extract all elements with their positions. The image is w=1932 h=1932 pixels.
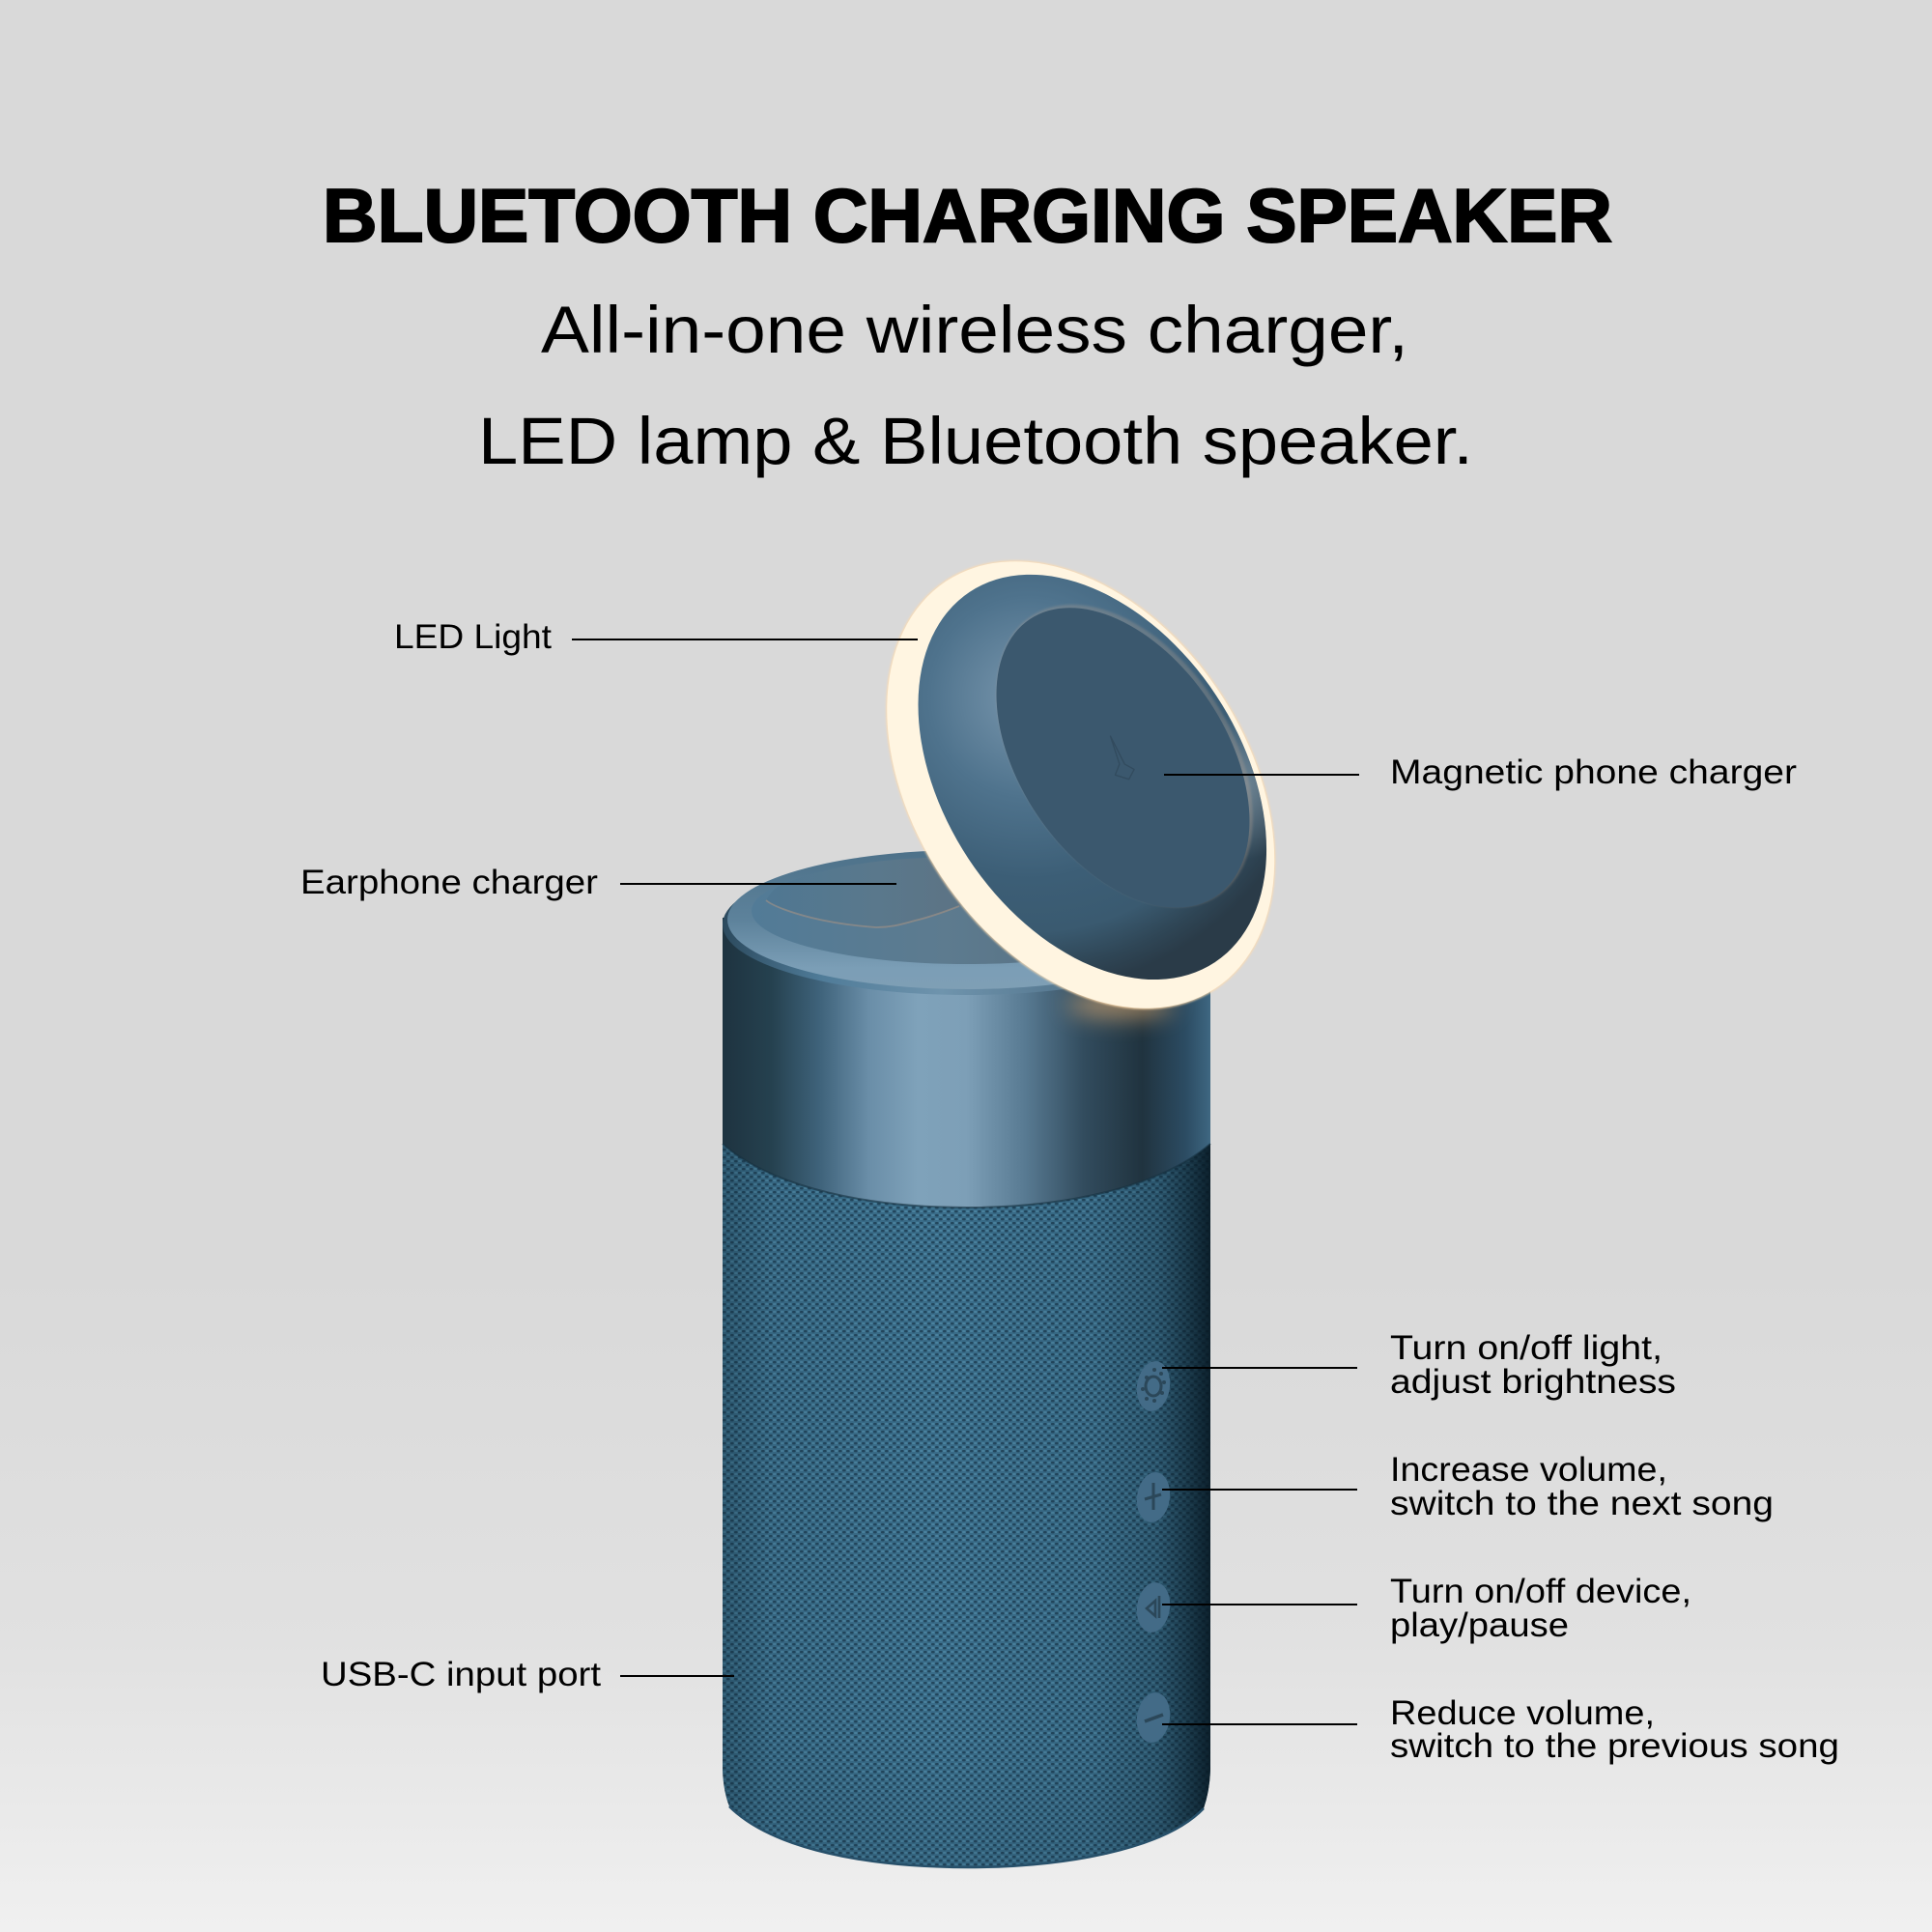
speaker product <box>723 488 1355 1867</box>
title: BLUETOOTH CHARGING SPEAKER <box>323 173 1612 258</box>
lamp glow on collar <box>1067 991 1174 1018</box>
button: plus <box>1134 1470 1173 1524</box>
logo mark <box>1111 736 1134 780</box>
callout: volume down: switch to the previous song <box>1390 1727 1839 1765</box>
magnetic lamp head <box>806 488 1355 1082</box>
lamp head bowl <box>846 510 1339 1044</box>
callout: power play: play/pause <box>1390 1606 1569 1644</box>
callout: volume down <box>1162 1694 1839 1765</box>
callout: Earphone charger: Earphone charger <box>300 864 598 901</box>
earphone charger recess <box>766 858 987 927</box>
callout: power play: Turn on/off device, <box>1390 1573 1691 1610</box>
callout: volume up: Increase volume, <box>1390 1451 1667 1489</box>
callout: USB-C input port: USB-C input port <box>321 1656 601 1693</box>
LED light ring <box>806 488 1355 1082</box>
subtitle <box>478 293 1473 478</box>
callout: volume up: switch to the next song <box>1390 1485 1774 1522</box>
pad light crescent <box>944 557 1306 954</box>
callout: brightness: Turn on/off light, <box>1390 1329 1662 1367</box>
metal collar <box>723 918 1210 1208</box>
callout: power play <box>1162 1573 1691 1644</box>
callout: brightness: adjust brightness <box>1390 1363 1676 1401</box>
callout: Magnetic phone charger: Magnetic phone charger <box>1390 753 1797 791</box>
button: minus <box>1134 1690 1173 1745</box>
callout: LED Light: LED Light <box>394 618 552 656</box>
callout: volume down: Reduce volume, <box>1390 1694 1655 1732</box>
callout: brightness <box>1162 1329 1676 1401</box>
subtitle: LED lamp & Bluetooth speaker. <box>478 404 1473 478</box>
fabric body <box>723 1130 1210 1867</box>
subtitle: All-in-one wireless charger, <box>541 293 1408 367</box>
button: brightness <box>1134 1359 1173 1413</box>
callout: volume up <box>1162 1451 1774 1522</box>
button: play pause <box>1134 1580 1173 1634</box>
magnetic charging pad <box>944 561 1302 953</box>
top cap <box>723 850 1211 995</box>
